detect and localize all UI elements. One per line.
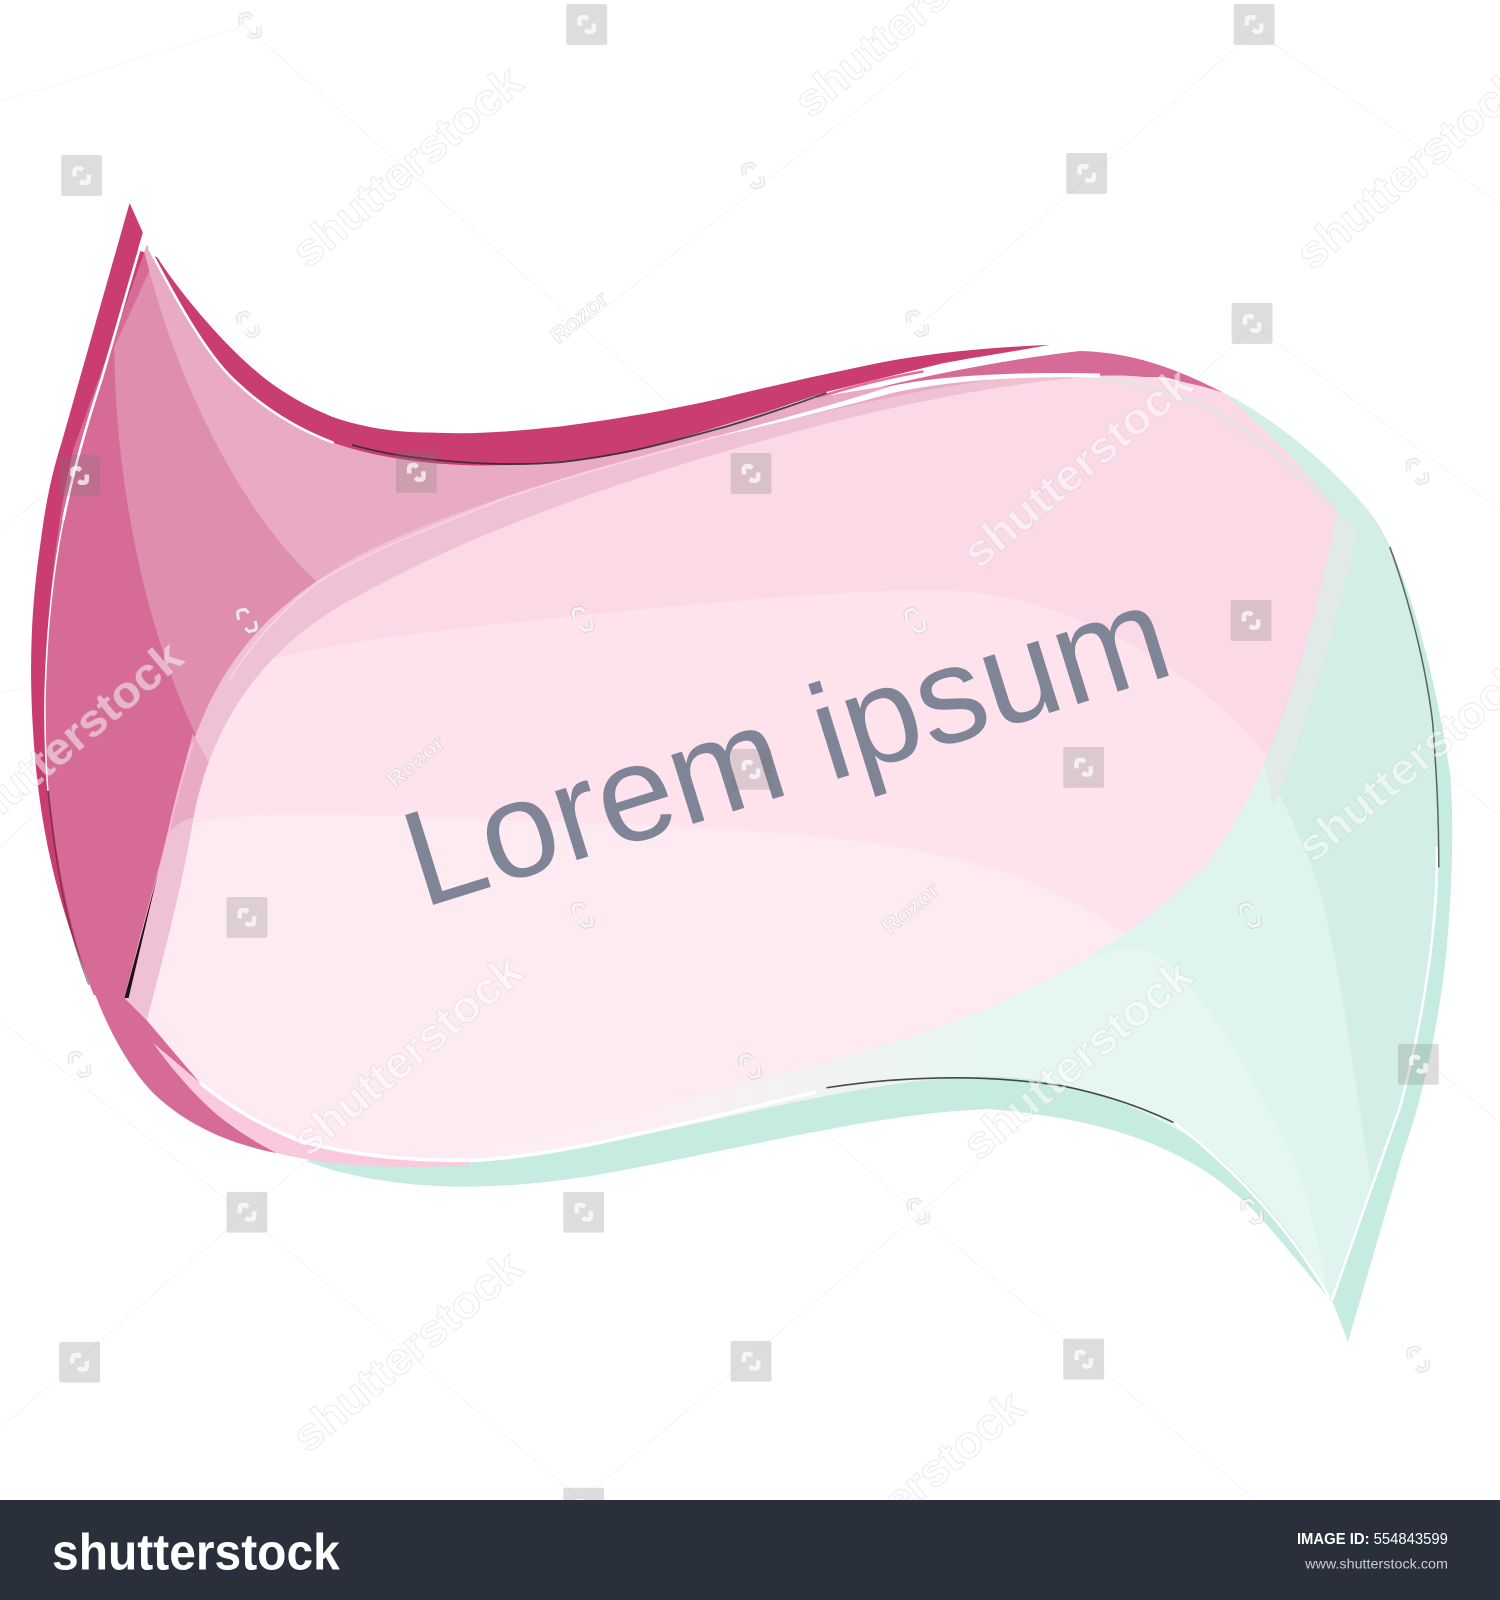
watermark: repeated wordmarks: shutterstock [784,1380,1034,1600]
shape: left sail [46,245,998,998]
watermark: repeated wordmarks: shutterstock [282,944,532,1166]
shape: translucent inner frame [124,376,1337,1140]
highlight: dark edge lines [48,393,1439,1122]
watermark: small swirl icons [70,13,1428,1372]
watermark: repeated wordmarks: shutterstock [282,56,532,277]
panel top gray rim [1100,379,1333,507]
watermark: repeated wordmarks: Rozor [545,286,613,349]
shape: lower left rose band [87,969,306,1153]
panel: main pink label [147,376,1336,1158]
highlight: white gap under ribbon [704,373,1100,440]
shape: pale pink lower band [153,1043,469,1167]
watermark: repeated wordmarks: shutterstock [282,1240,532,1462]
shape: mint label overlay [442,394,1438,1300]
shape: darker inset on frame [168,734,213,834]
watermark: repeated wordmarks: shutterstock [952,948,1202,1170]
shape: dark pink back ribbon [31,203,1050,998]
watermark: repeated wordmarks: Rozor [382,730,450,793]
highlight: white edge lines [45,231,1437,1301]
footer url: www.shutterstock.com [1304,1556,1448,1572]
highlight: dark corner sliver [124,872,158,998]
footer bar [0,1500,1500,1600]
highlight: hot pink glint on ribbon [816,371,923,398]
headline: Lorem ipsum: Lorem ipsum [386,555,1186,936]
watermark: repeated wordmarks: shutterstock [952,357,1202,578]
watermark: repeated wordmarks: Rozor [877,877,945,940]
footer image id: IMAGE ID: 554843599 [1297,1531,1448,1548]
shape: rose upper band [755,351,1223,420]
footer logo: shutterstock [52,1523,340,1580]
shape: mint back ribbon [306,393,1452,1342]
